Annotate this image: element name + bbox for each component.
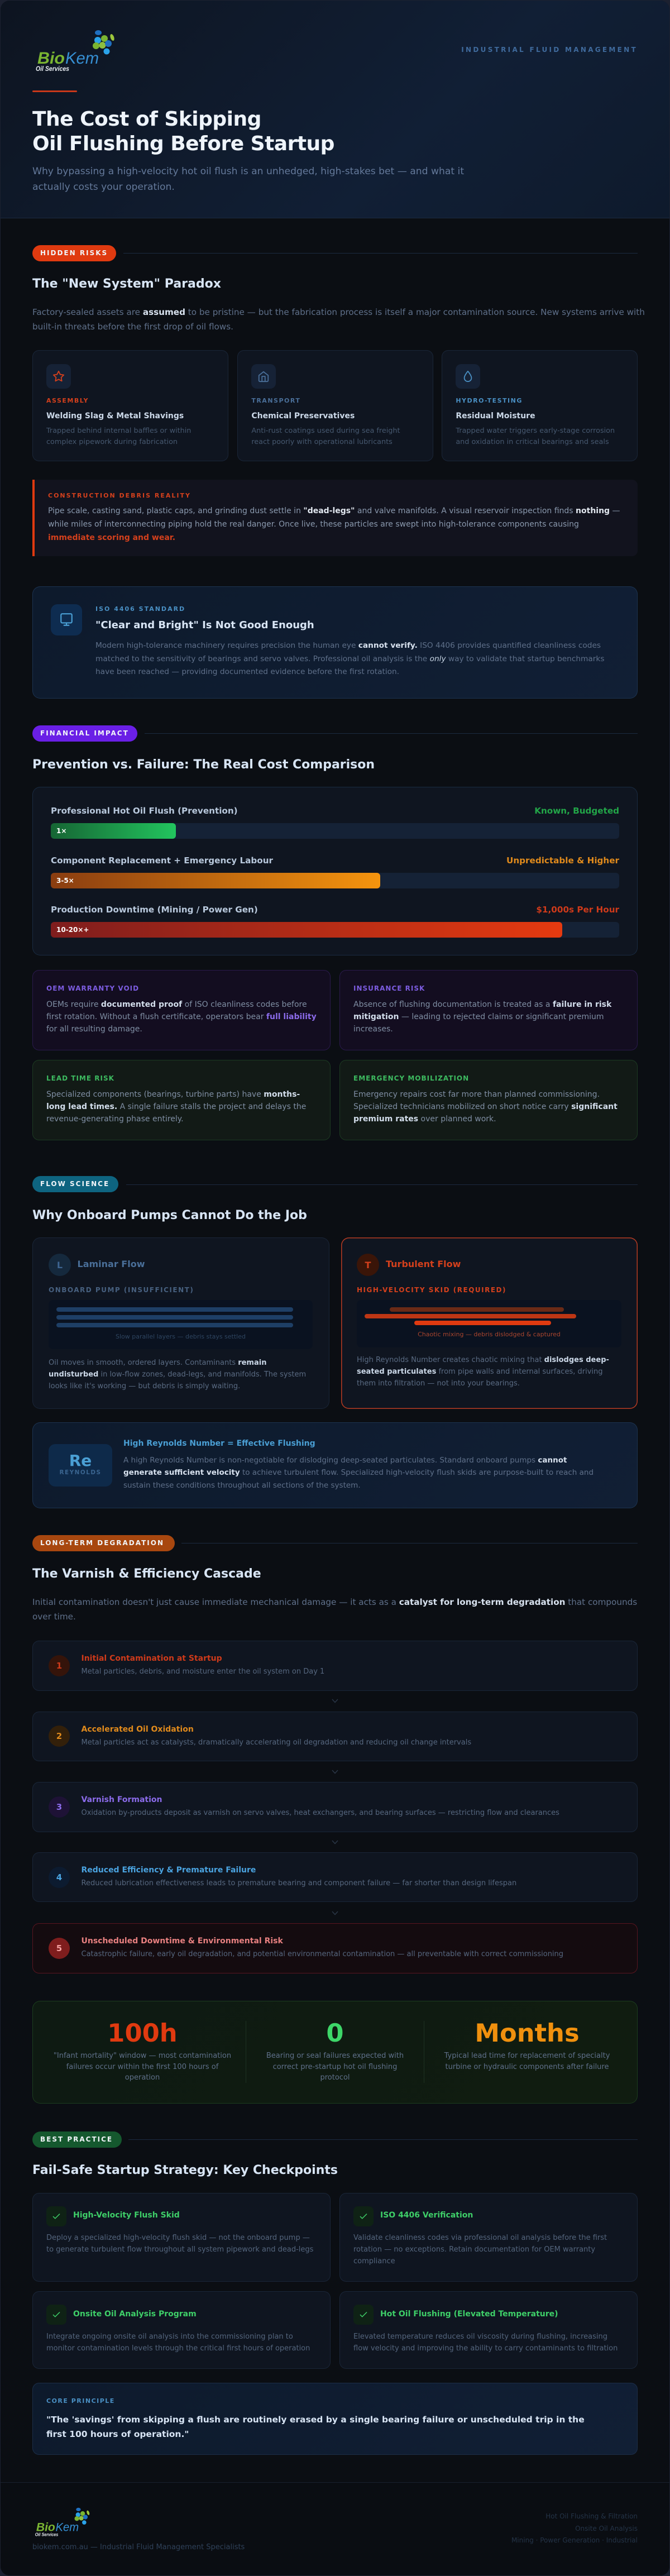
text	[46, 1000, 317, 1034]
callout text: while miles of interconnecting piping hold the real danger. Once live, these particles are swept into high-tolerance components causing	[48, 520, 579, 529]
title: The Cost of Skipping	[32, 108, 261, 131]
title: Hot Oil Flushing (Elevated Temperature)	[380, 2310, 558, 2319]
heading: cost comparison: Prevention vs. Failure: The Real Cost Comparison	[32, 758, 375, 772]
caption: Chaotic mixing — debris dislodged & captured	[418, 1331, 561, 1338]
section pill: flow science: FLOW SCIENCE	[40, 1180, 109, 1188]
title: High-Velocity Flush Skid	[73, 2211, 180, 2220]
footer logo	[35, 2507, 89, 2537]
step 5	[32, 1923, 638, 1973]
label: LEAD TIME RISK	[46, 1074, 114, 1082]
value: Known, Budgeted	[534, 806, 619, 816]
arrow	[332, 1699, 338, 1703]
text: first rotation. Without a flush certificate, operators bear full liability	[46, 1012, 317, 1021]
icon: check	[46, 2304, 66, 2324]
label: EMERGENCY MOBILIZATION	[353, 1074, 469, 1082]
text	[357, 1356, 609, 1388]
text: undisturbed in low-flow zones, dead-legs, and manifolds. The system	[49, 1370, 306, 1378]
stat text: Typical lead time for replacement of specialty	[444, 2052, 610, 2060]
callout: construction debris	[32, 480, 638, 556]
text: to generate turbulent flow throughout all system pipework and dead-legs	[46, 2245, 313, 2254]
section pill: hidden risks: HIDDEN RISKS	[40, 249, 108, 257]
logo: BioKem Oil Services: Bio	[37, 49, 65, 68]
checkpoint: ISO verification	[339, 2192, 638, 2282]
heading: checkpoints: Fail-Safe Startup Strategy: Key Checkpoints	[32, 2163, 338, 2177]
arrow	[332, 1841, 338, 1844]
text: Oil moves in smooth, ordered layers. Contaminants remain	[49, 1358, 266, 1367]
card: assembly	[32, 350, 228, 461]
stat text: failures occur within the first 100 hours of	[66, 2063, 218, 2071]
value: $1,000s Per Hour	[536, 905, 619, 915]
caption: Slow parallel layers — debris stays settled	[116, 1333, 246, 1340]
stat: months: Months	[475, 2018, 580, 2048]
footer services: Mining · Power Generation · Industrial	[511, 2536, 638, 2544]
text: sustain these conditions throughout all sections of the system.	[123, 1481, 361, 1490]
icon: monitor	[51, 604, 82, 635]
badge: Re: Re	[69, 1451, 92, 1470]
footer services: Hot Oil Flushing & Filtration	[545, 2512, 638, 2520]
label: CORE PRINCIPLE	[46, 2397, 115, 2405]
panel: ISO 4406 standard	[32, 586, 638, 699]
text: increases.	[353, 1025, 393, 1034]
label: HYDRO-TESTING	[456, 397, 523, 404]
logo: BioKem Oil Services	[36, 30, 114, 73]
text	[46, 2234, 313, 2254]
number	[49, 1796, 70, 1817]
label: Production Downtime (Mining / Power Gen)	[51, 905, 258, 915]
card: transport	[237, 350, 433, 461]
arrow	[332, 1770, 338, 1774]
section pill: flow science	[32, 1176, 118, 1192]
icon: house	[251, 364, 276, 389]
label: TRANSPORT	[251, 397, 300, 404]
stat: 0: 0	[326, 2018, 344, 2048]
title: Oil Flushing Before Startup	[32, 132, 334, 155]
subtitle	[32, 166, 464, 193]
diagram: turbulent bars	[357, 1300, 621, 1347]
card title: Welding Slag & Metal Shavings	[46, 412, 184, 420]
bar row: replacement	[51, 856, 619, 888]
diagram: laminar bars	[49, 1300, 313, 1349]
footer	[0, 2482, 670, 2576]
title	[32, 108, 334, 155]
number: 2	[56, 1731, 62, 1741]
footer services: Onsite Oil Analysis	[575, 2525, 638, 2532]
description: react poorly with operational lubricants	[251, 438, 393, 446]
description	[46, 427, 191, 446]
text: compliance	[353, 2257, 395, 2266]
label: Component Replacement + Emergency Labour	[51, 856, 273, 866]
bar row: downtime	[51, 905, 619, 938]
text	[123, 1456, 594, 1490]
text: them into filtration — not into your bearings.	[357, 1379, 520, 1388]
text: OEMs require documented proof of ISO cleanliness codes before	[46, 1000, 307, 1009]
intro paragraph: Initial contamination doesn't just cause immediate mechanical damage — it acts as a catalyst for long-term degradation that compounds	[32, 1597, 637, 1607]
body text: have been reached — providing documented evidence before the first rotation.	[95, 667, 399, 676]
step 4	[32, 1852, 638, 1902]
stat text: protocol	[320, 2073, 350, 2082]
text: Integrate ongoing onsite oil analysis into the commissioning plan to	[46, 2332, 293, 2341]
bar row: flush	[51, 806, 619, 839]
section pill: hidden risks	[32, 245, 116, 261]
text: for all resulting damage.	[46, 1025, 142, 1034]
label: Professional Hot Oil Flush (Prevention)	[51, 806, 238, 816]
text: Absence of flushing documentation is treated as a failure in risk	[353, 1000, 611, 1009]
number: 1	[56, 1661, 62, 1671]
text: Specialized components (bearings, turbine parts) have months-	[46, 1090, 300, 1099]
description: Anti-rust coatings used during sea freight	[251, 427, 400, 435]
title: Onsite Oil Analysis Program	[73, 2310, 197, 2319]
card title: Residual Moisture	[456, 412, 535, 420]
icon: check	[353, 2304, 374, 2324]
icon: star	[46, 364, 71, 389]
stat text	[444, 2052, 610, 2071]
arrow	[332, 1911, 338, 1915]
subtitle: Why bypassing a high-velocity hot oil flush is an unhedged, high-stakes bet — and what it	[32, 166, 464, 177]
card: emergency mobilization	[339, 1060, 638, 1140]
text: Specialized technicians mobilized on short notice carry significant	[353, 1102, 618, 1111]
heading: new system paradox: The "New System" Paradox	[32, 277, 221, 291]
panel: turbulent flow	[341, 1237, 638, 1409]
checkpoint: oil analysis	[32, 2291, 331, 2369]
text: seated particulates from pipe walls and internal surfaces, driving	[357, 1368, 603, 1376]
section pill: best practice: BEST PRACTICE	[40, 2135, 113, 2143]
value: Unpredictable & Higher	[506, 856, 619, 866]
icon: droplet	[456, 364, 480, 389]
label: ASSEMBLY	[46, 397, 89, 404]
text: Elevated temperature reduces oil viscosity during flushing, increasing	[353, 2332, 607, 2341]
bar: 10-20×+	[56, 926, 89, 934]
number: 5	[56, 1943, 62, 1953]
text: monitor contamination levels through the critical first hours of operation	[46, 2344, 310, 2352]
stat text: correct pre-startup hot oil flushing	[273, 2063, 397, 2071]
description: complex pipework during fabrication	[46, 438, 178, 446]
card: OEM warranty	[32, 969, 331, 1050]
text	[353, 1000, 612, 1034]
footer services	[511, 2512, 638, 2544]
heading: Turbulent Flow	[386, 1259, 461, 1269]
stat text: Bearing or seal failures expected with	[266, 2052, 404, 2060]
checkpoint: flush skid	[32, 2192, 331, 2282]
body text	[95, 641, 604, 676]
text: mitigation — leading to rejected claims or significant premium	[353, 1012, 604, 1021]
heading: onboard pumps: Why Onboard Pumps Cannot Do the Job	[32, 1208, 307, 1222]
title: Initial Contamination at Startup	[82, 1654, 222, 1663]
heading: varnish cascade: The Varnish & Efficiency Cascade	[32, 1567, 261, 1581]
logo: BioKem Oil Services: Kem	[65, 49, 99, 68]
text: flow velocity and improving the ability to carry contaminants to filtration	[353, 2344, 618, 2352]
header tagline: INDUSTRIAL FLUID MANAGEMENT	[461, 46, 638, 54]
intro paragraph	[32, 307, 645, 332]
step 3	[32, 1781, 638, 1832]
circle: T	[357, 1254, 379, 1276]
label: INSURANCE RISK	[353, 984, 425, 992]
description: Metal particles act as catalysts, dramatically accelerating oil degradation and reducing oil change intervals	[82, 1738, 471, 1747]
section pill: long-term degradation: LONG-TERM DEGRADATION	[40, 1539, 164, 1547]
title: Varnish Formation	[82, 1795, 162, 1804]
card: hydro-testing	[442, 350, 638, 461]
heading: Laminar Flow	[77, 1259, 145, 1269]
stat text: "Infant mortality" window — most contamination	[54, 2052, 231, 2060]
number	[49, 1655, 70, 1676]
bar: 3-5×	[56, 877, 74, 885]
circle: L: L	[57, 1260, 63, 1270]
callout label: CONSTRUCTION DEBRIS REALITY	[48, 491, 191, 499]
text: revenue-generating phase entirely.	[46, 1115, 184, 1124]
sub label: ONBOARD PUMP (INSUFFICIENT)	[49, 1285, 194, 1293]
label: OEM WARRANTY VOID	[46, 984, 139, 992]
description: Oxidation by-products deposit as varnish on servo valves, heat exchangers, and bearing surfaces — restricting flow and clearances	[82, 1808, 559, 1817]
text: looks like it's working — but debris is simply waiting.	[49, 1382, 240, 1390]
accent bar	[32, 90, 77, 92]
body text: Modern high-tolerance machinery requires precision the human eye cannot verify. ISO 4406 provides quantified cleanliness codes	[95, 641, 601, 650]
number	[49, 1726, 70, 1747]
panel: core principle	[32, 2383, 638, 2455]
description: Trapped water triggers early-stage corrosion	[456, 427, 615, 435]
callout text: Pipe scale, casting sand, plastic caps, and grinding dust settle in "dead-legs" and valve manifolds. A visual reservoir inspection finds nothing —	[48, 506, 620, 515]
badge: Re: REYNOLDS	[60, 1469, 101, 1476]
bar: 1×	[56, 827, 66, 835]
heading: "Clear and Bright" Is Not Good Enough	[95, 619, 314, 631]
callout text: immediate scoring and wear.	[48, 533, 175, 542]
title: ISO 4406 Verification	[380, 2211, 473, 2220]
stat text: operation	[125, 2073, 160, 2082]
footer logo: Bio	[36, 2521, 55, 2534]
intro paragraph: Factory-sealed assets are assumed to be pristine — but the fabrication process is itself a major contamination source. New systems arrive with	[32, 307, 645, 317]
bar	[51, 873, 619, 888]
number: 4	[56, 1872, 62, 1882]
bar	[51, 922, 619, 938]
label: ISO 4406 STANDARD	[95, 605, 185, 613]
number	[49, 1866, 70, 1887]
section pill: financial impact	[32, 725, 137, 742]
card title: Chemical Preservatives	[251, 412, 355, 420]
text	[46, 2332, 310, 2352]
description	[456, 427, 615, 446]
badge: Re	[49, 1444, 112, 1487]
text	[353, 2332, 618, 2352]
text: generate sufficient velocity to achieve turbulent flow. Specialized high-velocity flush skids are purpose-built to reach and	[123, 1468, 594, 1477]
panel: laminar flow	[32, 1237, 329, 1409]
stat text	[266, 2052, 404, 2082]
description: Metal particles, debris, and moisture enter the oil system on Day 1	[82, 1667, 324, 1675]
intro paragraph: over time.	[32, 1612, 76, 1622]
text: High Reynolds Number creates chaotic mixing that dislodges deep-	[357, 1356, 609, 1364]
quote: "The 'savings' from skipping a flush are routinely erased by a single bearing failure or unscheduled trip in the	[46, 2415, 585, 2425]
description: Trapped behind internal baffles or within	[46, 427, 191, 435]
number: 3	[56, 1801, 62, 1812]
section pill: best practice	[32, 2131, 122, 2148]
text: A high Reynolds Number is non-negotiable for dislodging deep-seated particulates. Standard onboard pumps cannot	[123, 1456, 567, 1465]
text: Emergency repairs cost far more than planned commissioning.	[353, 1090, 600, 1099]
intro paragraph	[32, 1597, 637, 1622]
bar	[51, 823, 619, 839]
quote: first 100 hours of operation."	[46, 2429, 189, 2439]
title: Reduced Efficiency & Premature Failure	[82, 1866, 256, 1875]
logo: BioKem Oil Services: Oil Services	[36, 65, 69, 73]
card: lead time risk	[32, 1060, 331, 1140]
text: premium rates over planned work.	[353, 1115, 496, 1124]
stat text: turbine or hydraulic components after failure	[446, 2063, 609, 2071]
callout text	[48, 506, 620, 542]
heading: High Reynolds Number = Effective Flushing	[123, 1439, 315, 1448]
circle: T: T	[365, 1260, 371, 1270]
title: Accelerated Oil Oxidation	[82, 1724, 194, 1733]
section pill: financial impact: FINANCIAL IMPACT	[40, 729, 129, 737]
footer logo: Oil Services	[35, 2531, 59, 2537]
footer logo: Kem	[56, 2521, 79, 2534]
sub label: HIGH-VELOCITY SKID (REQUIRED)	[357, 1285, 506, 1293]
description: Reduced lubrication effectiveness leads to premature bearing and component failure — far shorter than design lifespan	[82, 1879, 516, 1887]
subtitle: actually costs your operation.	[32, 181, 175, 193]
icon: check	[353, 2206, 374, 2226]
step 1	[32, 1641, 638, 1691]
text	[49, 1358, 306, 1390]
description: Catastrophic failure, early oil degradation, and potential environmental contamination — all preventable with correct commissioning	[82, 1950, 563, 1958]
description	[251, 427, 400, 446]
number	[49, 1938, 70, 1959]
text: rotation — no exceptions. Retain documentation for OEM warranty	[353, 2245, 595, 2254]
text	[353, 2234, 607, 2266]
stat: 100h: 100h	[107, 2018, 178, 2048]
icon: check	[46, 2206, 66, 2226]
stat text	[54, 2052, 231, 2082]
text: long lead times. A single failure stalls the project and delays the	[46, 1102, 306, 1111]
checkpoint: hot oil flushing	[339, 2291, 638, 2369]
description: and oxidation in critical bearings and seals	[456, 438, 609, 446]
intro paragraph: built-in threats before the first drop of oil flows.	[32, 322, 233, 332]
text	[46, 1090, 306, 1124]
panel: cost comparison bars	[32, 787, 638, 955]
section pill: long-term degradation	[32, 1535, 175, 1551]
title: Unscheduled Downtime & Environmental Risk	[82, 1937, 283, 1946]
panel: key statistics	[32, 2000, 638, 2104]
text: Deploy a specialized high-velocity flush skid — not the onboard pump —	[46, 2234, 310, 2242]
step 2	[32, 1711, 638, 1761]
text	[353, 1090, 618, 1124]
card: insurance risk	[339, 969, 638, 1050]
text: Validate cleanliness codes via professional oil analysis before the first	[353, 2234, 607, 2242]
circle: L	[49, 1254, 71, 1276]
body text: matched to the sensitivity of bearings and servo valves. Professional oil analysis is the only way to validate that startup benchmarks	[95, 654, 604, 663]
header panel	[0, 0, 670, 218]
panel: Reynolds number	[32, 1422, 638, 1508]
footer site line: biokem.com.au — Industrial Fluid Management Specialists	[32, 2543, 245, 2551]
quote	[46, 2415, 585, 2439]
